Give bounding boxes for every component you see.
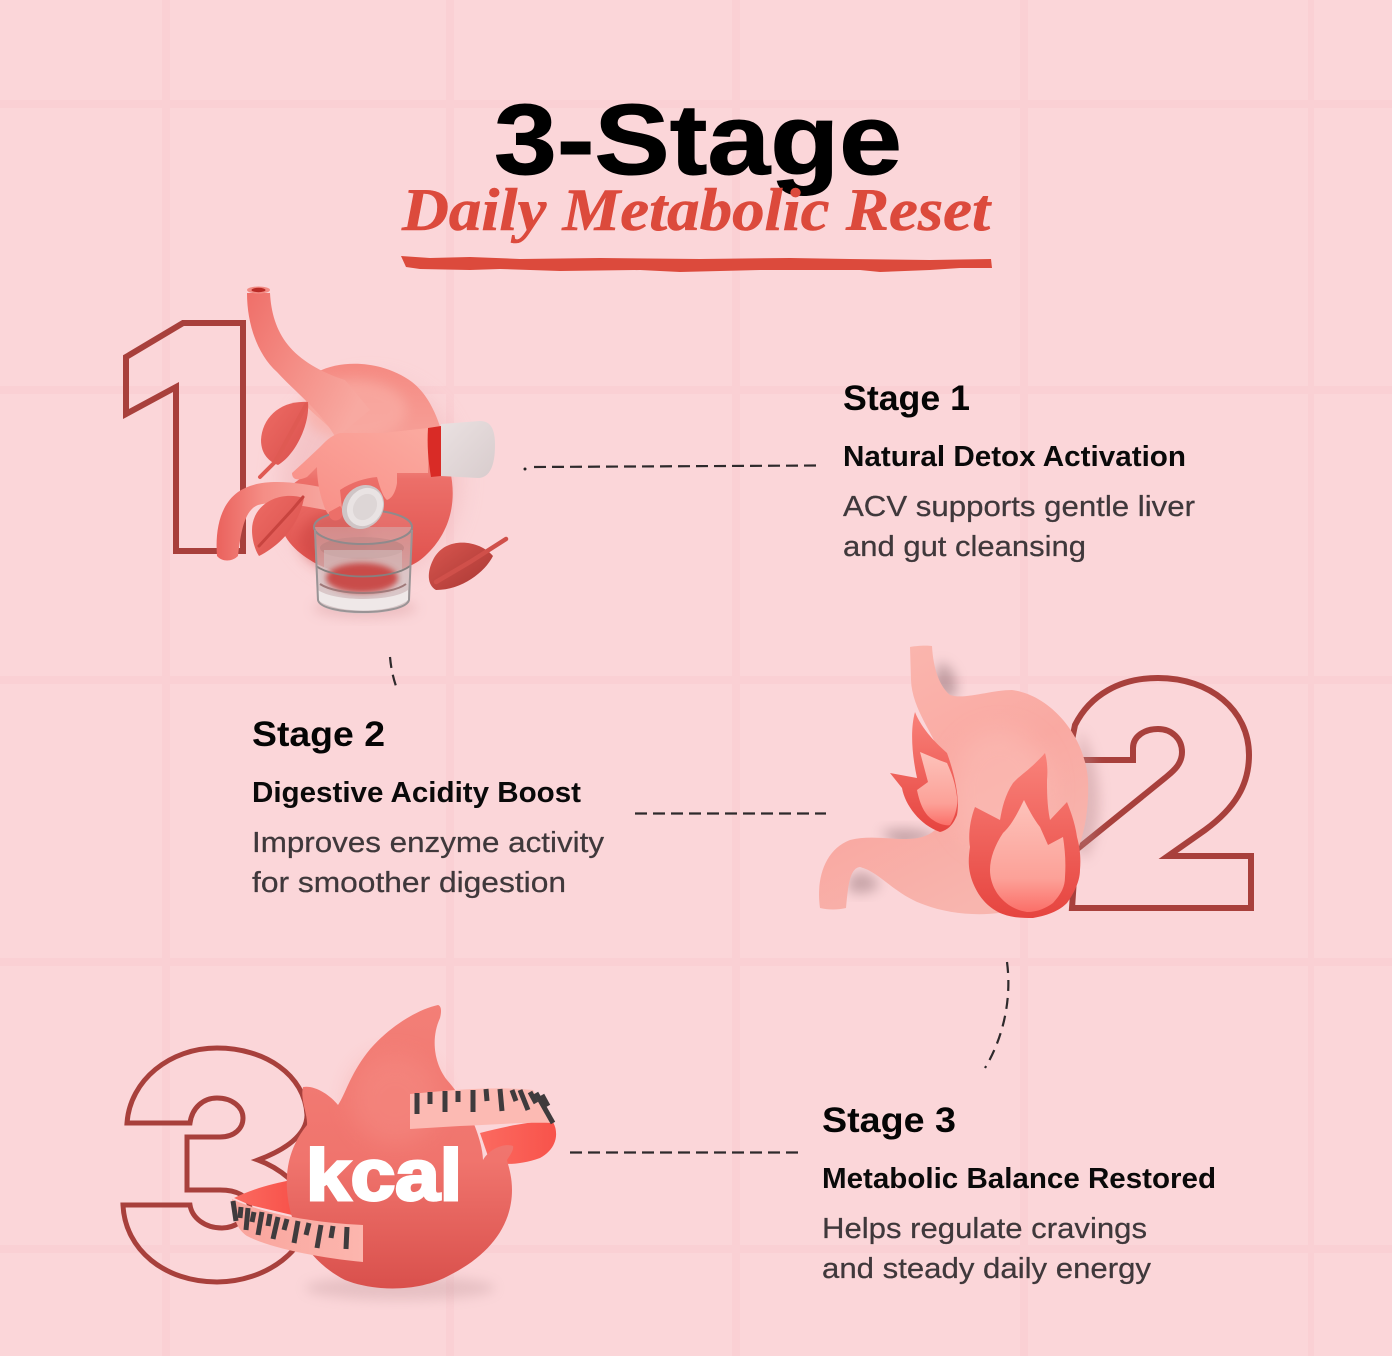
icon: stomach with shadow: [819, 646, 1099, 914]
icon: hand: [292, 428, 428, 517]
heading: 3-Stage: 3-Stage: [494, 84, 902, 196]
icon: leaf middle: [252, 496, 304, 556]
stage 2 description: [252, 827, 605, 899]
stage 3 heading: Metabolic Balance Restored: [822, 1163, 1216, 1195]
subtitle: Daily Metabolic Reset: [401, 177, 993, 243]
numeral 2 outline: [1068, 678, 1251, 908]
stage 2 label: Stage 2: [252, 715, 385, 754]
icon: tape upper: [410, 1088, 553, 1129]
icon: small flame: [890, 712, 958, 832]
connector stage 1 to 2: [390, 657, 397, 689]
connector stage 3: [570, 1151, 802, 1154]
stage 2 text: [252, 715, 605, 899]
stage 2 description: for smoother digestion: [252, 867, 566, 899]
stage 1 description: [843, 491, 1195, 563]
stage 1 label: Stage 1: [843, 379, 970, 418]
icon: tape lower: [232, 1199, 363, 1262]
stage 1 illustration: [126, 286, 506, 618]
stage 2 description: Improves enzyme activity: [252, 827, 605, 859]
stage 3 label: Stage 3: [822, 1101, 956, 1140]
icon: kcal flame: [287, 1005, 513, 1288]
icon: lid: [329, 477, 393, 537]
icon: tape back band: [234, 1122, 556, 1300]
kcal text: kcal: [306, 1136, 462, 1216]
numeral 1 outline: [126, 323, 243, 551]
stage 3 description: Helps regulate cravings: [822, 1213, 1147, 1245]
stage 3 text: [822, 1101, 1216, 1285]
stage 1 description: and gut cleansing: [843, 531, 1086, 563]
stage 1 description: ACV supports gentle liver: [843, 491, 1195, 523]
icon: leaf bottom right: [429, 539, 506, 590]
brush underline: [401, 256, 992, 272]
stage 2 illustration: [819, 646, 1251, 918]
icon: large flame: [969, 753, 1080, 918]
numeral 3 outline: [123, 1048, 310, 1282]
icon: stomach lower tube: [217, 482, 335, 560]
stage 1 heading: Natural Detox Activation: [843, 441, 1186, 473]
stage 3 illustration: [123, 1005, 556, 1300]
title: [401, 84, 993, 272]
icon: sleeve cuff: [428, 421, 495, 478]
stage 1 text: [843, 379, 1195, 563]
icon: glass of water: [313, 510, 417, 618]
connector stage 1: [524, 466, 820, 470]
connector stage 2 to 3: [985, 962, 1008, 1068]
icon: stomach: [247, 286, 460, 580]
connector stage 2: [635, 812, 826, 815]
stage 3 description: [822, 1213, 1152, 1285]
icon: leaf top: [260, 402, 308, 477]
stage 3 description: and steady daily energy: [822, 1253, 1152, 1285]
stage 2 heading: Digestive Acidity Boost: [252, 777, 582, 809]
